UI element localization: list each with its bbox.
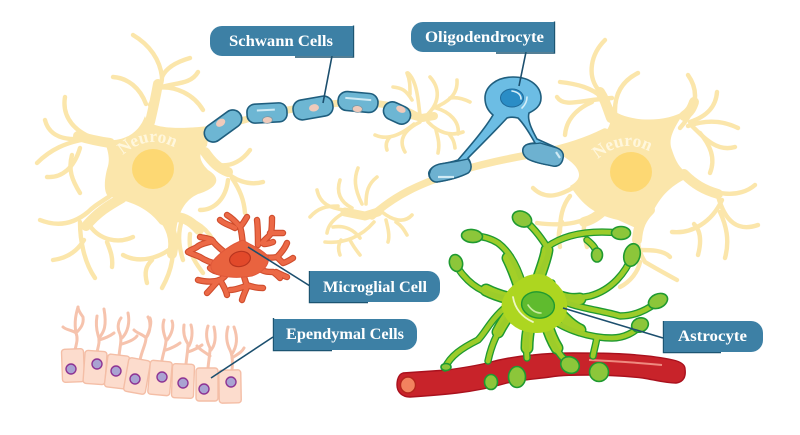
label: Astrocyte	[664, 321, 763, 352]
connector: Schwann Cells	[323, 56, 332, 103]
astrocyte end bulbs	[441, 208, 670, 390]
top small dendrite cluster	[375, 73, 470, 153]
connector: Astrocyte	[563, 308, 663, 338]
schwann cell 5	[381, 99, 413, 127]
microglial cell	[188, 215, 293, 300]
label: Oligodendrocyte: Oligodendrocyte	[425, 29, 544, 46]
schwann cell 4	[337, 91, 379, 114]
schwann cell 3	[292, 95, 334, 121]
label: Ependymal Cells: Ependymal Cells	[286, 326, 404, 343]
microglial nucleus	[228, 249, 252, 269]
astrocyte soma	[502, 274, 567, 332]
label: Microglial Cell	[310, 271, 440, 302]
schwann cell 2	[247, 102, 288, 124]
astrocyte nucleus	[519, 289, 557, 321]
label: Schwann Cells	[210, 26, 354, 57]
connector: Ependymal Cells	[211, 337, 273, 378]
nuclei	[66, 359, 236, 394]
curved label: Neuron (right): Neuron	[591, 138, 651, 159]
right neuron	[533, 40, 758, 287]
cell bodies	[61, 349, 241, 403]
schwann cells	[201, 91, 413, 146]
astrocyte	[441, 208, 670, 390]
curved label: Neuron (left): Neuron	[116, 134, 176, 155]
connector: Microglial Cell	[248, 247, 310, 286]
oligodendrocyte nucleus	[500, 89, 524, 107]
lower small dendrite cluster	[310, 168, 412, 255]
oligodendrocyte	[429, 77, 563, 182]
cilia	[63, 307, 244, 370]
ependymal cells	[61, 307, 244, 403]
astrocyte branch bases	[486, 250, 580, 348]
right neuron nucleus	[610, 152, 652, 192]
label: Microglial Cell: Microglial Cell	[323, 279, 428, 296]
label: Astrocyte: Astrocyte	[678, 328, 747, 345]
label: Schwann Cells: Schwann Cells	[229, 33, 333, 50]
right neuron axon	[372, 132, 605, 216]
left neuron nucleus	[132, 149, 174, 189]
label: Oligodendrocyte	[411, 22, 554, 53]
label: Ependymal Cells	[274, 318, 417, 350]
connector: Oligodendrocyte	[519, 52, 526, 86]
blood vessel	[397, 353, 685, 397]
schwann cell 1	[201, 106, 245, 146]
left neuron	[37, 35, 263, 288]
left neuron axon	[205, 103, 420, 134]
